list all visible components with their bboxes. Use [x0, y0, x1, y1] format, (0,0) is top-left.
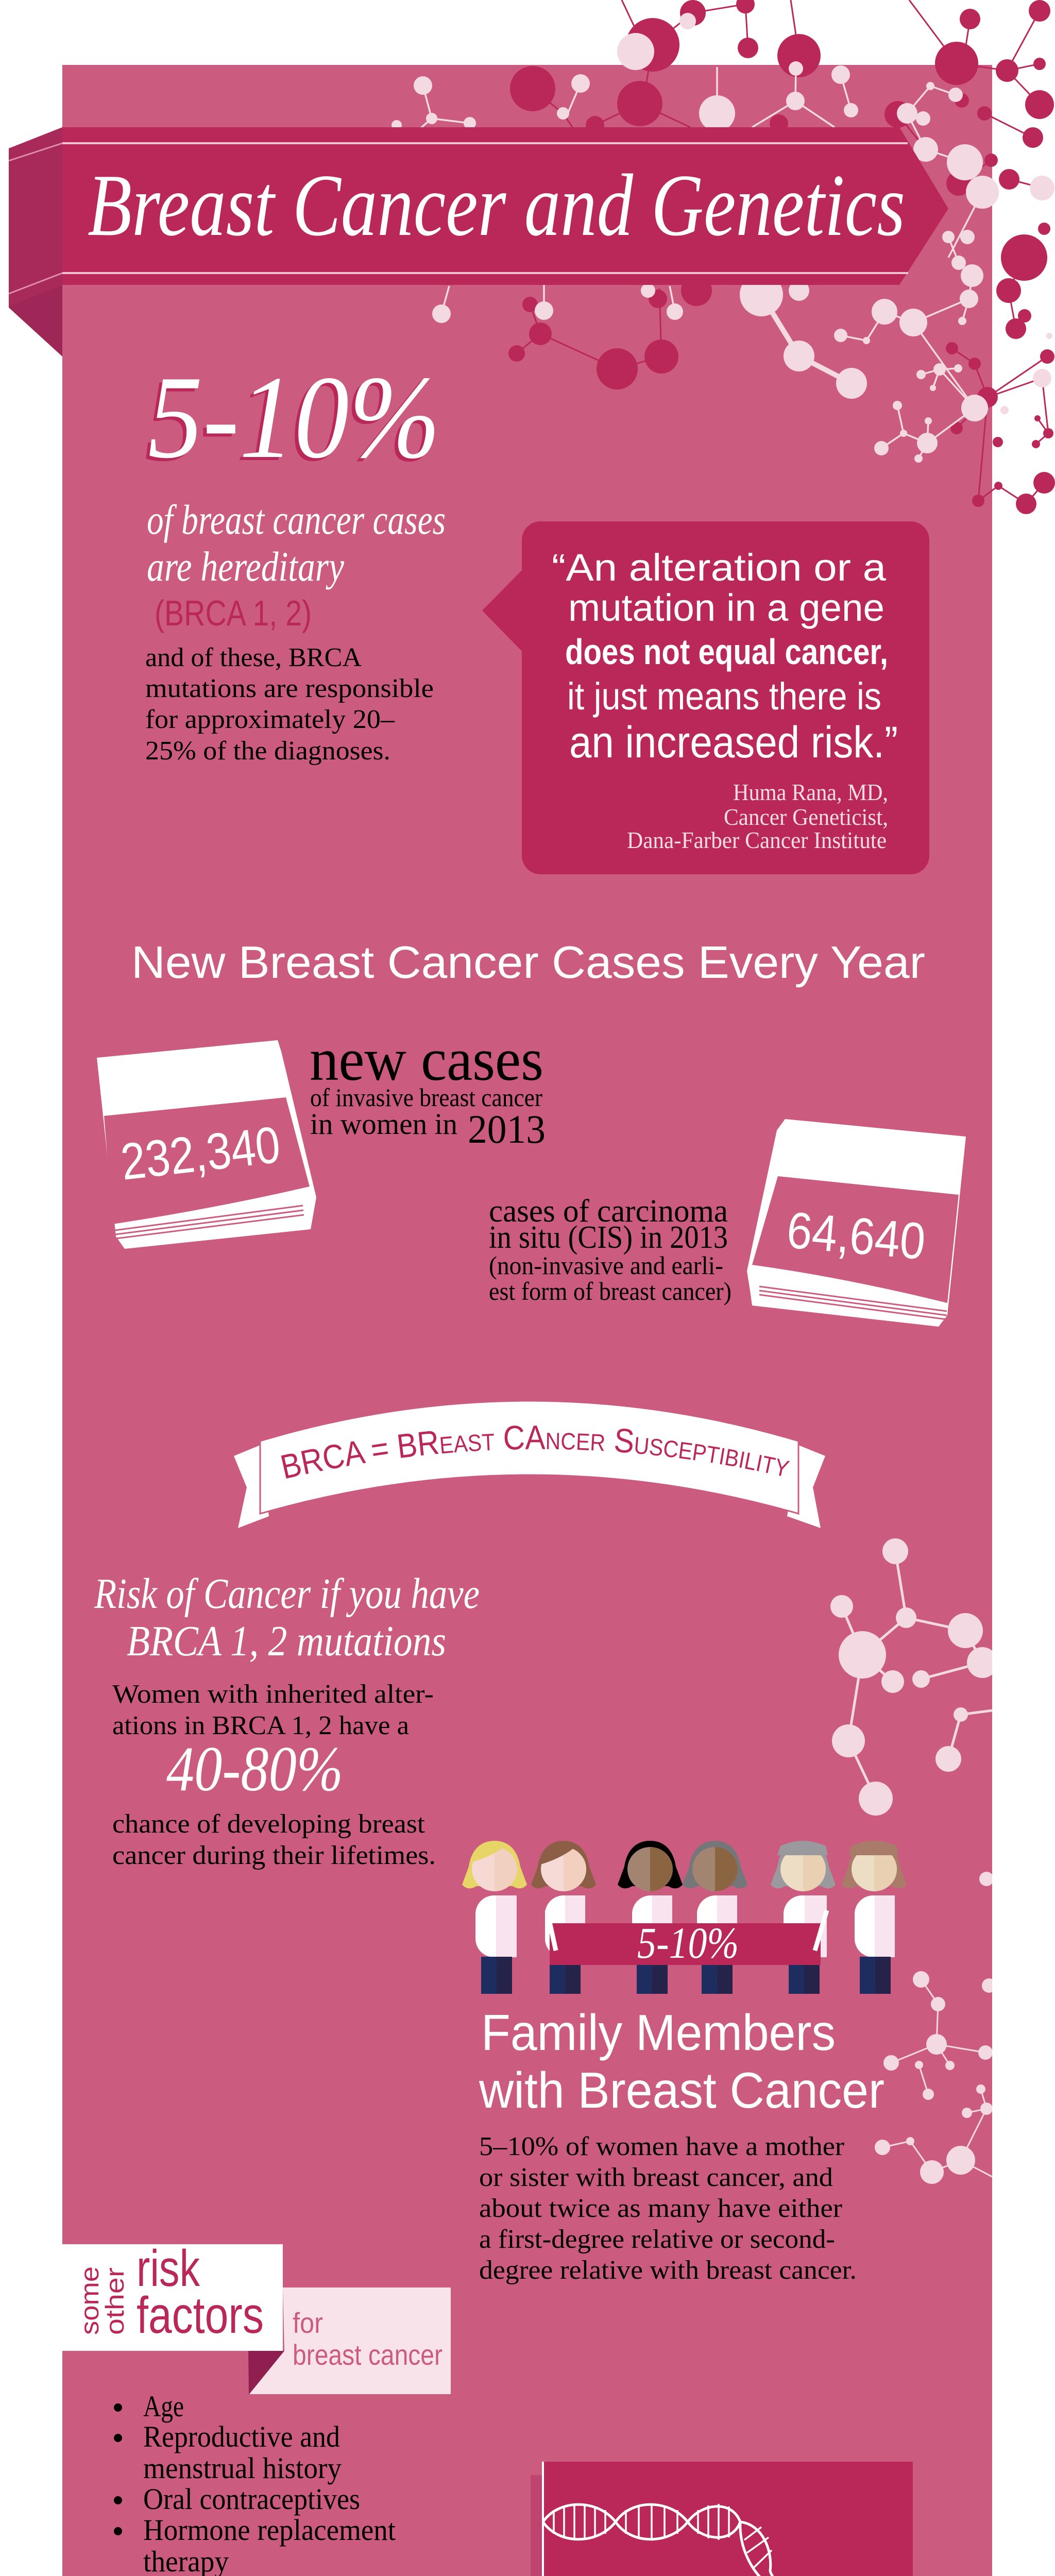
text: new cases of invasive breast cancer: 2013: [468, 1107, 546, 1151]
card: some other risk factors: risk: [137, 2240, 200, 2297]
statistic: 5-10% hereditary: of breast cancer cases: [147, 496, 446, 543]
statistic: 5-10% hereditary: 5-10%: [148, 351, 440, 483]
risk of cancer section: ations in BRCA 1, 2 have a: [112, 1711, 409, 1740]
card: some other risk factors: other: [100, 2267, 129, 2335]
statistic: 5-10% hereditary: and of these, BRCA: [145, 643, 362, 672]
figure: dark grey-haired woman: [683, 1841, 747, 1994]
molecules: top right pale: [392, 13, 1054, 463]
risk of cancer section: cancer during their lifetimes.: [112, 1841, 436, 1870]
list: risk factors: Oral contraceptives: [143, 2482, 360, 2516]
figure: light brown-haired woman: [842, 1841, 907, 1994]
statistic: 5-10% hereditary: (BRCA 1, 2): [155, 593, 312, 633]
figure: grey-haired woman: [771, 1841, 836, 1994]
quote callout: Huma Rana, MD,: [733, 779, 888, 805]
statistic: 5-10% hereditary: [144, 351, 446, 766]
quote callout: Dana-Farber Cancer Institute: [627, 827, 887, 853]
heading: new cases: New Breast Cancer Cases Every Year: [131, 937, 925, 988]
quote callout: does not equal cancer,: [565, 632, 888, 672]
card: some other risk factors: breast cancer: [293, 2338, 443, 2371]
banner: 5-10%: [547, 1910, 827, 1968]
card: some other risk factors: [62, 2240, 451, 2395]
molecules: top right crimson: [508, 0, 1055, 514]
text: carcinoma in situ: [489, 1194, 731, 1306]
icon: book 64,640: 64,640: [785, 1201, 928, 1270]
statistic: 5-10% hereditary: for approximately 20–: [145, 705, 395, 734]
risk of cancer section: chance of developing breast: [112, 1809, 426, 1839]
family members text: a first-degree relative or second-: [479, 2225, 835, 2254]
statistic: 5-10% hereditary: 25% of the diagnoses.: [145, 736, 390, 766]
statistic: 5-10% hereditary: 5-10%: [144, 354, 437, 486]
list: risk factors: Hormone replacement: [143, 2513, 396, 2547]
figure: brown-haired woman: [531, 1841, 596, 1994]
quote callout: “An alteration or a: [552, 546, 887, 589]
family members text: degree relative with breast cancer.: [479, 2256, 857, 2285]
quote callout: it just means there is: [567, 675, 881, 718]
molecule: right middle: [830, 1538, 998, 2184]
icon: book 232,340: [97, 1040, 316, 1249]
statistic: 5-10% hereditary: mutations are responsible: [145, 674, 434, 703]
risk of cancer section: Risk of Cancer if you have: [94, 1570, 480, 1618]
list: risk factors: [114, 2389, 396, 2576]
family members text: about twice as many have either: [479, 2194, 842, 2223]
text: carcinoma in situ: in situ (CIS) in 2013: [489, 1220, 728, 1255]
quote callout: an increased risk.”: [569, 718, 898, 767]
quote callout: mutation in a gene: [568, 586, 884, 629]
banner: BRCA definition: [234, 1401, 825, 1528]
text: carcinoma in situ: est form of breast cancer): [489, 1277, 731, 1306]
family figures: [462, 1841, 907, 1994]
statistic: 5-10% hereditary: are hereditary: [147, 543, 344, 590]
family members text: or sister with breast cancer, and: [479, 2163, 833, 2192]
text: carcinoma in situ: (non-invasive and earli-: [489, 1251, 723, 1280]
icon: DNA helix arrow: [543, 2504, 884, 2576]
risk of cancer section: 40-80%: [166, 1734, 343, 1804]
card: some other risk factors: for: [293, 2307, 323, 2339]
card: 90% DNA: [531, 2462, 913, 2576]
quote callout: [482, 521, 929, 874]
figure: black-haired woman: [618, 1841, 683, 1994]
family members text: with Breast Cancer: [479, 2062, 884, 2119]
family members text: [479, 2004, 884, 2285]
risk of cancer section: BRCA 1, 2 mutations: [127, 1617, 446, 1665]
family members text: 5–10% of women have a mother: [479, 2132, 844, 2161]
card: some other risk factors: some: [75, 2266, 104, 2335]
icon: book 64,640: [747, 1119, 966, 1327]
text: new cases of invasive breast cancer: of invasive breast cancer: [310, 1083, 542, 1112]
icon: book 232,340: 232,340: [118, 1115, 283, 1191]
quote callout: Cancer Geneticist,: [724, 804, 888, 830]
family members text: Family Members: [481, 2004, 836, 2061]
text: carcinoma in situ: cases of carcinoma: [489, 1194, 728, 1229]
list: risk factors: Reproductive and: [143, 2420, 340, 2453]
risk of cancer section: Women with inherited alter-: [112, 1680, 434, 1709]
title ribbon: [9, 127, 948, 357]
card: some other risk factors: factors: [137, 2286, 264, 2344]
list: risk factors: menstrual history: [143, 2451, 342, 2485]
text: new cases of invasive breast cancer: [310, 1026, 546, 1151]
risk of cancer section: [94, 1570, 480, 1870]
text: new cases of invasive breast cancer: new cases: [310, 1026, 543, 1093]
banner: 5-10%: 5-10%: [637, 1918, 739, 1968]
figure: blonde woman: [462, 1841, 527, 1994]
text: new cases of invasive breast cancer: in women in: [310, 1107, 457, 1141]
list: risk factors: Age: [143, 2389, 184, 2423]
banner: BRCA definition: BRCA = BREAST CANCER SUSCEPTIBILITY: [281, 1426, 790, 1479]
